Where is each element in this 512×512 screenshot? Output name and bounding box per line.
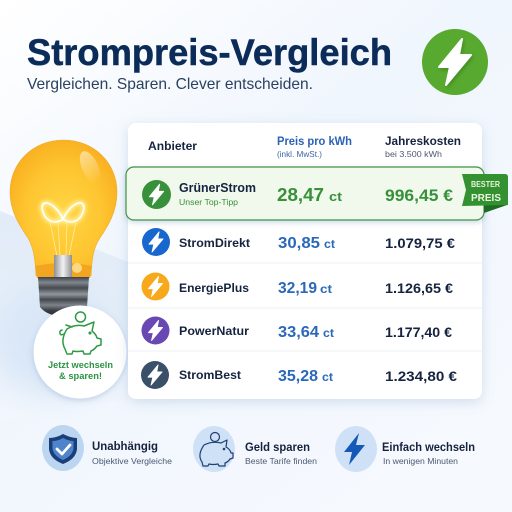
row: PowerNatur: PowerNatur: [179, 324, 249, 338]
row: StromDirekt: StromDirekt: [179, 236, 250, 250]
icon: GrünerStrom: [142, 180, 171, 209]
badge text: Jetzt wechseln: [48, 360, 113, 371]
table header: bei 3.500 kWh: [385, 149, 442, 159]
icon: piggy bank: [60, 312, 101, 354]
feature: Einfach wechseln: Einfach wechseln: [382, 440, 475, 454]
row: StromDirekt: 30,85: [278, 235, 320, 252]
title: Strompreis-Vergleich: [27, 32, 392, 73]
feature: Unabhängig: Unabhängig: [92, 439, 158, 453]
row: PowerNatur: 1.177,40 €: [385, 324, 452, 340]
row: StromBest: StromBest: [179, 368, 241, 382]
row: PowerNatur: ct: [323, 328, 334, 340]
row: StromBest: [141, 361, 457, 389]
badge text: & sparen!: [59, 371, 102, 382]
illustration: light bulb: [10, 140, 117, 316]
row: PowerNatur: [142, 316, 452, 344]
row: GrünerStrom highlighted: 996,45 €: [385, 187, 453, 205]
table header: [148, 134, 461, 159]
row: GrünerStrom highlighted: 28,47: [277, 185, 324, 205]
row: GrünerStrom highlighted: Unser Top-Tipp: [179, 197, 238, 207]
icon: lightning bolt: [344, 433, 365, 465]
row: StromBest: 35,28: [278, 368, 318, 385]
feature: Einfach wechseln: In wenigen Minuten: [383, 456, 458, 466]
table header: Anbieter: [148, 139, 197, 153]
row: StromDirekt: 1.079,75 €: [385, 235, 455, 251]
row: StromDirekt: ct: [324, 239, 335, 251]
row: GrünerStrom highlighted: GrünerStrom: [179, 181, 256, 195]
row: StromDirekt: [142, 228, 455, 256]
feature: Geld sparen: Beste Tarife finden: [245, 456, 317, 466]
ribbon: Bester Preis: [462, 174, 508, 213]
row: EnergiePlus: ct: [320, 284, 332, 296]
table header: (inkl. MwSt.): [277, 149, 322, 159]
table header: Jahreskosten: [385, 134, 461, 148]
row: PowerNatur: 33,64: [278, 324, 319, 341]
row: GrünerStrom highlighted: [126, 167, 484, 220]
feature: Geld sparen: Geld sparen: [245, 440, 310, 454]
icon: shield: [49, 434, 77, 464]
feature: Geld sparen: [193, 426, 317, 472]
panel: comparison table: [126, 123, 508, 399]
ribbon: Bester Preis: PREIS: [471, 192, 501, 204]
icon: piggy bank: [200, 432, 233, 466]
row: EnergiePlus: 32,19: [278, 280, 317, 297]
table header: Preis pro kWh: [277, 134, 352, 148]
feature: Einfach wechseln: [335, 426, 475, 472]
subtitle: Vergleichen. Sparen. Clever entscheiden.: [27, 76, 313, 93]
row: StromBest: ct: [322, 372, 333, 384]
row: StromBest: 1.234,80 €: [385, 368, 457, 384]
feature: Unabhängig: Objektive Vergleiche: [92, 456, 172, 466]
feature: Unabhängig: [42, 425, 172, 471]
row: EnergiePlus: [142, 272, 453, 300]
ribbon: Bester Preis: BESTER: [471, 180, 500, 189]
row: GrünerStrom highlighted: ct: [329, 189, 343, 204]
row: EnergiePlus: EnergiePlus: [179, 281, 249, 295]
panel: call to action badge: [34, 306, 126, 398]
row: EnergiePlus: 1.126,65 €: [385, 280, 453, 296]
icon: green lightning badge: [422, 29, 488, 95]
badge text: [48, 360, 113, 382]
